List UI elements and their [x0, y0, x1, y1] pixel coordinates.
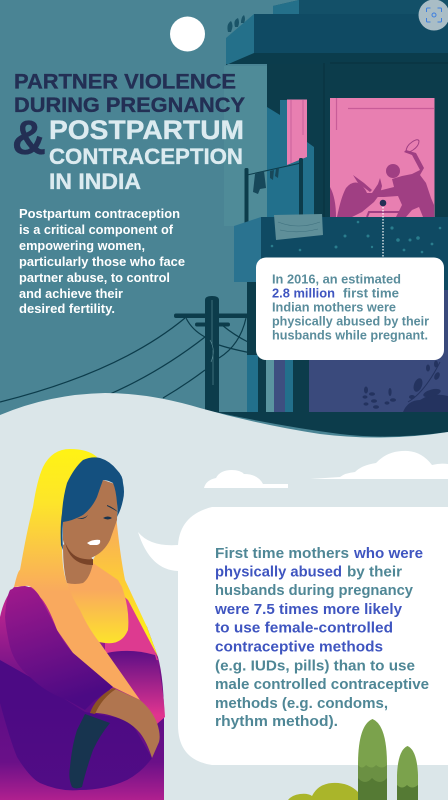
cloud left: [204, 470, 288, 488]
callout: 2.8 million statistic: In 2016, an estimated: [272, 272, 401, 286]
bubble text: husbands during pregnancy: [215, 583, 413, 599]
pink main window: [330, 98, 434, 217]
bubble text: were 7.5 times more likely: [214, 602, 402, 618]
bubble text: [214, 546, 429, 730]
dark ground strip: [215, 412, 448, 437]
body base: [0, 587, 164, 800]
callout: 2.8 million statistic: Indian mothers were: [272, 300, 396, 314]
intro paragraph: Postpartum contraception: [19, 207, 180, 221]
tall tree: [358, 719, 387, 800]
building side wall: [224, 66, 268, 226]
chest drape: [67, 563, 128, 643]
figures: man striking woman: [330, 150, 434, 217]
forearm: [90, 688, 160, 758]
trees and bush: [288, 719, 418, 800]
background: teal sky: [0, 0, 448, 440]
neck: [63, 530, 93, 584]
intro paragraph: partner abuse, to control: [19, 271, 170, 285]
plants at the ground floor: [362, 360, 448, 412]
side wall in blue: [267, 100, 314, 217]
mouth: [87, 540, 100, 545]
small pink window: [287, 100, 307, 165]
pink chest panel: [105, 587, 158, 660]
bubble text: rhythm method).: [215, 714, 338, 730]
callout: 2.8 million statistic: physically abused by their: [272, 314, 429, 328]
lower background hill: [0, 393, 448, 800]
face: [63, 480, 118, 558]
eyes and brow: [77, 505, 118, 520]
title line: during pregnancy: DURING PREGNANCY: [14, 93, 245, 117]
intro paragraph: is a critical component of: [19, 223, 174, 237]
callout: 2.8 million statistic: 2.8 million: [272, 286, 335, 300]
bush: [288, 783, 368, 800]
table: [367, 212, 405, 217]
veil and front drape: [14, 449, 140, 700]
bubble text: (e.g. IUDs, pills) than to use: [215, 658, 415, 674]
chin shadow: [65, 542, 93, 565]
lap circle: [0, 660, 152, 790]
bubble text: First time mothers: [215, 546, 349, 562]
rooftop plants: [227, 15, 245, 32]
moon: [170, 16, 205, 52]
utility pole and wires: [0, 296, 262, 412]
title line: postpartum: POSTPARTUM: [49, 115, 244, 145]
bubble text: physically abused: [215, 564, 342, 580]
balcony slab: [254, 14, 448, 54]
bubble text: contraceptive methods: [215, 640, 383, 656]
belly top: [107, 651, 165, 730]
hair: [61, 457, 124, 550]
callout: 2.8 million statistic: husbands while pregnant.: [272, 328, 428, 342]
lower balcony: [234, 214, 448, 292]
illustration: apartment building: [224, 0, 448, 412]
ampersand: &: [12, 112, 46, 165]
speech bubble: [138, 507, 448, 765]
bubble text: who were: [353, 546, 423, 562]
title line: contraception: CONTRACEPTION: [49, 144, 243, 169]
title line: partner violence: PARTNER VIOLENCE: [14, 70, 236, 94]
intro paragraph: empowering women,: [19, 239, 145, 253]
cloud right: [310, 451, 448, 479]
bubble text: methods (e.g. condoms,: [215, 696, 388, 712]
scan icon badge: [418, 0, 448, 30]
speckles: [271, 221, 441, 253]
towel on railing: [274, 214, 323, 240]
sleeve: [5, 586, 113, 710]
title line: in india: IN INDIA: [49, 169, 141, 194]
callout: 2.8 million statistic: [256, 258, 444, 360]
short tree: [397, 746, 418, 800]
callout: 2.8 million statistic: first time: [343, 286, 399, 300]
ground floor columns: [247, 282, 448, 412]
building dark facade: [267, 63, 448, 223]
intro paragraph: and achieve their: [19, 287, 123, 301]
bubble text: by their: [347, 564, 402, 580]
callout connector dot and dotted line: [380, 200, 386, 258]
bubble text: to use female-controlled: [215, 620, 393, 636]
clothesline: [244, 158, 303, 224]
intro paragraph: particularly those who face: [19, 255, 185, 269]
bubble text: male controlled contraceptive: [215, 677, 429, 693]
title: [12, 70, 245, 194]
upper roof block: [273, 0, 448, 16]
right veil fold: [90, 515, 158, 657]
dark hand: [69, 714, 110, 788]
illustration: pregnant woman in sari: [0, 449, 165, 800]
intro paragraph: desired fertility.: [19, 302, 115, 316]
intro paragraph: [19, 207, 185, 316]
